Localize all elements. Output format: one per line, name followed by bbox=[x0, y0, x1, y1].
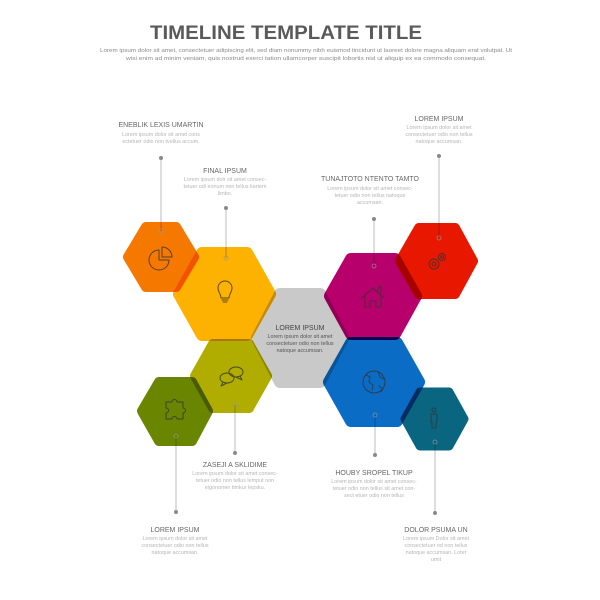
label: tunajtoto ntento tamto: accumsan. bbox=[357, 200, 383, 206]
label: dolor psuma un: DOLOR PSUMA UN bbox=[404, 527, 468, 534]
icon: pie chart bbox=[149, 247, 172, 270]
label: zaseji a sklidime: Lorem ipsum dolor sit amet consec- bbox=[192, 471, 278, 477]
label: eneblik lexis umartin: ectetuer odio non tvellus accum. bbox=[122, 139, 200, 145]
label: dolor psuma un: natoque accumsan. Loter bbox=[406, 550, 467, 556]
label: lorem ipsum top right: natoque accumsan. bbox=[415, 139, 463, 145]
label: houby sropel tikup: Lorem ipsum dolor sit amet consec- bbox=[331, 479, 417, 485]
icon: light bulb bbox=[218, 281, 232, 302]
label: dolor psuma un: consectetuer od non tellus bbox=[405, 543, 468, 549]
hexagon: olive bbox=[195, 344, 267, 408]
hexagon: gray center bbox=[257, 294, 343, 382]
label: houby sropel tikup: tetuer odio non tellus sit amet con- bbox=[333, 486, 415, 492]
label: tunajtoto ntento tamto: Lorem ipsum dolor sit amet consec- bbox=[327, 186, 413, 192]
icon: gears bbox=[429, 254, 446, 269]
label: houby sropel tikup: sect etuer odio non tellus bbox=[344, 493, 404, 499]
label: final ipsum: limbo. bbox=[218, 191, 232, 197]
label: lorem ipsum top right: Lorem ipsum dolor sit amet bbox=[406, 125, 472, 131]
subtitle bbox=[100, 48, 512, 62]
hexagon: red bbox=[400, 228, 473, 294]
center text block: natoque accumsan. bbox=[276, 348, 324, 354]
label: eneblik lexis umartin: Lorem ipsum dolor sit amet cons bbox=[122, 132, 200, 138]
label: tunajtoto ntento tamto: TUNAJTOTO NTENTO TAMTO bbox=[321, 176, 420, 183]
hexagon: blue bbox=[329, 343, 419, 421]
label: lorem ipsum bottom left: consectetuer odio non tellus bbox=[141, 543, 209, 549]
label: lorem ipsum top right bbox=[405, 116, 473, 145]
label: lorem ipsum top right: LOREM IPSUM bbox=[414, 116, 464, 123]
title: TIMELINE TEMPLATE TITLE bbox=[150, 23, 422, 44]
label: dolor psuma un: umit bbox=[431, 557, 442, 563]
label: eneblik lexis umartin: ENEBLIK LEXIS UMARTIN bbox=[118, 122, 204, 129]
center text block: Lorem ipsum dolor sit amet bbox=[267, 334, 333, 340]
label: final ipsum bbox=[183, 168, 267, 197]
label: lorem ipsum bottom left bbox=[141, 527, 209, 556]
center text block: consectetuer odio non tellus bbox=[266, 341, 334, 347]
connector lines bbox=[159, 154, 441, 515]
center text block: LOREM IPSUM bbox=[275, 325, 325, 332]
hexagon: teal bbox=[405, 392, 464, 446]
label: lorem ipsum bottom left: natoque accumsan. bbox=[151, 550, 199, 556]
connector end circles inside hexagons bbox=[159, 229, 441, 444]
label: dolor psuma un: Lorem ipsum Dolor sit amet bbox=[403, 536, 469, 542]
label: lorem ipsum top right: consectetuer odio non tellus bbox=[405, 132, 473, 138]
hexagon: yellow bbox=[179, 253, 270, 335]
label: zaseji a sklidime: tetuer odio non tellus lemput non bbox=[196, 478, 274, 484]
icon: speech bubbles bbox=[220, 367, 243, 386]
hexagon: magenta bbox=[330, 259, 416, 334]
label: dolor psuma un bbox=[403, 527, 469, 563]
subtitle: Lorem ipsum dolor sit amet, consectetuer adipiscing elit, sed diam nonummy nibh euismod tincidunt ut laoreet dolore magna aliquam erat volutpat. Ut bbox=[100, 48, 512, 54]
label: lorem ipsum bottom left: LOREM IPSUM bbox=[150, 527, 200, 534]
label: zaseji a sklidime: eigonomer timkur lepsku. bbox=[205, 485, 265, 491]
label: eneblik lexis umartin bbox=[118, 122, 204, 145]
icon: globe bbox=[363, 371, 385, 393]
icon: person bbox=[431, 408, 437, 428]
label: lorem ipsum bottom left: Lorem ipsum dolor sit amet bbox=[142, 536, 208, 542]
label: zaseji a sklidime bbox=[192, 462, 278, 491]
icon: puzzle bbox=[166, 400, 186, 419]
label: final ipsum: FINAL IPSUM bbox=[203, 168, 247, 175]
label: houby sropel tikup bbox=[331, 470, 417, 499]
label: zaseji a sklidime: ZASEJI A SKLIDIME bbox=[203, 462, 267, 469]
label: tunajtoto ntento tamto: tetuer odio non tellus natoque bbox=[334, 193, 406, 199]
label: final ipsum: Lorem ipsum dolr sit amet consec- bbox=[184, 177, 266, 183]
icon: house bbox=[362, 287, 384, 307]
label: final ipsum: tetuer odi eonum non tellus kartem bbox=[183, 184, 267, 190]
hexagon: orange bbox=[128, 227, 194, 287]
hexagon: dark green bbox=[142, 382, 208, 441]
label: houby sropel tikup: HOUBY SROPEL TIKUP bbox=[335, 470, 413, 477]
center text block bbox=[266, 325, 334, 354]
label: tunajtoto ntento tamto bbox=[321, 176, 420, 206]
subtitle: wisi enim ad minim veniam, quis nostrud exerci tation ullamcorper suscipit lobortis nisl ut aliquip ex ea commodo consequat. bbox=[125, 56, 487, 62]
